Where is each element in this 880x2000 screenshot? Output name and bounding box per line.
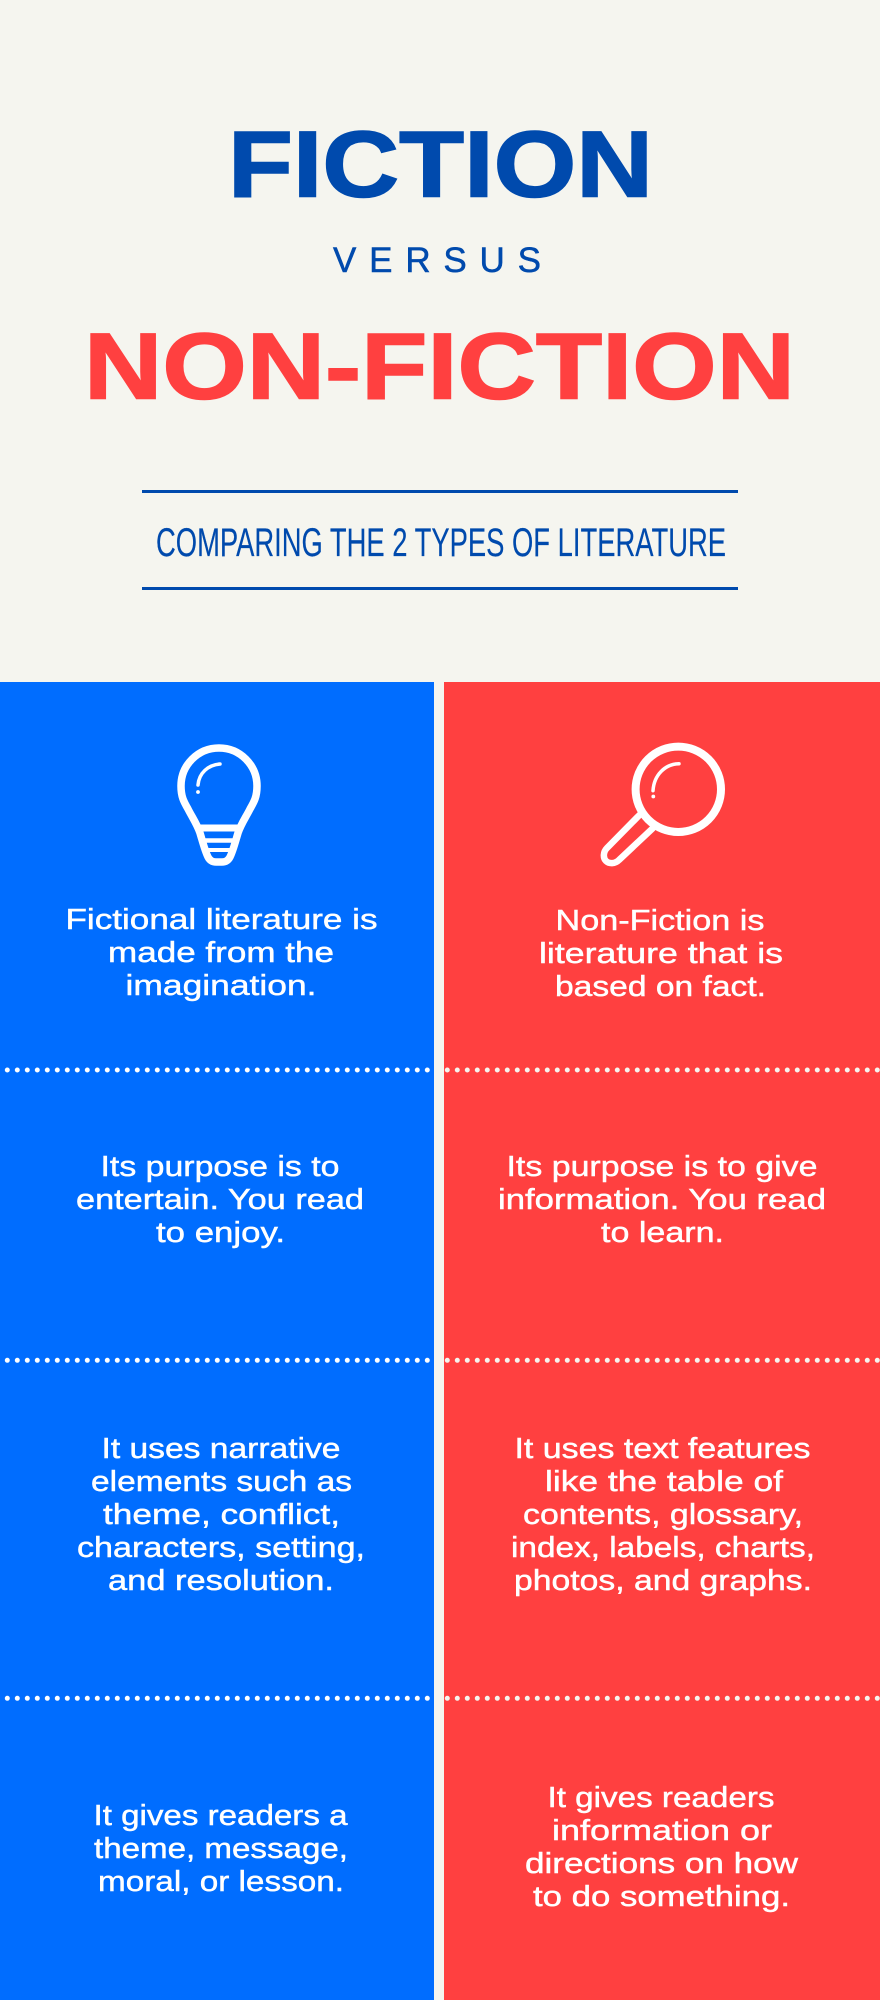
text: non-fiction definition: Non-Fiction is <box>556 905 764 937</box>
text: fiction narrative elements: and resolution. <box>108 1565 334 1597</box>
text: non-fiction text features: contents, glossary, <box>523 1499 803 1531</box>
text: non-fiction directions: It gives readers <box>548 1782 774 1814</box>
text: non-fiction text features: It uses text features <box>514 1433 810 1465</box>
icon: light bulb <box>181 748 257 862</box>
title: fiction: FICTION <box>228 112 653 216</box>
heading: versus: VERSUS <box>333 241 541 280</box>
panel: fiction <box>0 682 434 2000</box>
text: non-fiction purpose: information. You read <box>498 1184 826 1216</box>
text: non-fiction text features <box>511 1433 815 1597</box>
text: fiction narrative elements <box>77 1433 365 1597</box>
text: fiction purpose: entertain. You read <box>76 1184 364 1216</box>
title: non-fiction: NON-FICTION <box>84 314 795 418</box>
text: non-fiction directions: information or <box>552 1815 773 1847</box>
text: fiction definition: Fictional literature is <box>66 904 378 936</box>
text: fiction definition <box>66 904 378 1002</box>
text: non-fiction text features: photos, and graphs. <box>514 1565 812 1597</box>
text: non-fiction definition <box>539 905 783 1003</box>
text: non-fiction directions: to do something. <box>533 1881 790 1913</box>
text: non-fiction purpose: to learn. <box>601 1217 724 1249</box>
text: fiction definition: made from the <box>108 937 334 969</box>
subtitle block with rules <box>142 490 738 590</box>
text: fiction purpose <box>76 1151 364 1249</box>
panel background: blue <box>0 682 434 2000</box>
text: non-fiction text features: index, labels, charts, <box>511 1532 815 1564</box>
text: fiction narrative elements: It uses narrative <box>102 1433 340 1465</box>
text: fiction narrative elements: theme, conflict, <box>103 1499 340 1531</box>
text: fiction message: moral, or lesson. <box>98 1866 344 1898</box>
panel: non-fiction <box>444 682 880 2000</box>
text: fiction definition: imagination. <box>126 970 316 1002</box>
text: non-fiction definition: based on fact. <box>555 971 766 1003</box>
text: fiction narrative elements: elements such as <box>91 1466 352 1498</box>
text: fiction narrative elements: characters, setting, <box>77 1532 365 1564</box>
text: non-fiction directions: directions on how <box>525 1848 799 1880</box>
text: non-fiction purpose: Its purpose is to give <box>506 1151 818 1183</box>
text: fiction message <box>94 1800 348 1898</box>
text: non-fiction text features: like the table of <box>545 1466 783 1498</box>
text: non-fiction directions <box>525 1782 799 1913</box>
icon: magnifying glass <box>604 747 721 863</box>
text: fiction message: It gives readers a <box>94 1800 348 1832</box>
header <box>84 112 795 590</box>
panel background: red <box>444 682 880 2000</box>
text: fiction message: theme, message, <box>94 1833 348 1865</box>
text: fiction purpose: to enjoy. <box>156 1217 285 1249</box>
text: fiction purpose: Its purpose is to <box>100 1151 340 1183</box>
text: non-fiction definition: literature that is <box>539 938 783 970</box>
text: non-fiction purpose <box>498 1151 826 1249</box>
